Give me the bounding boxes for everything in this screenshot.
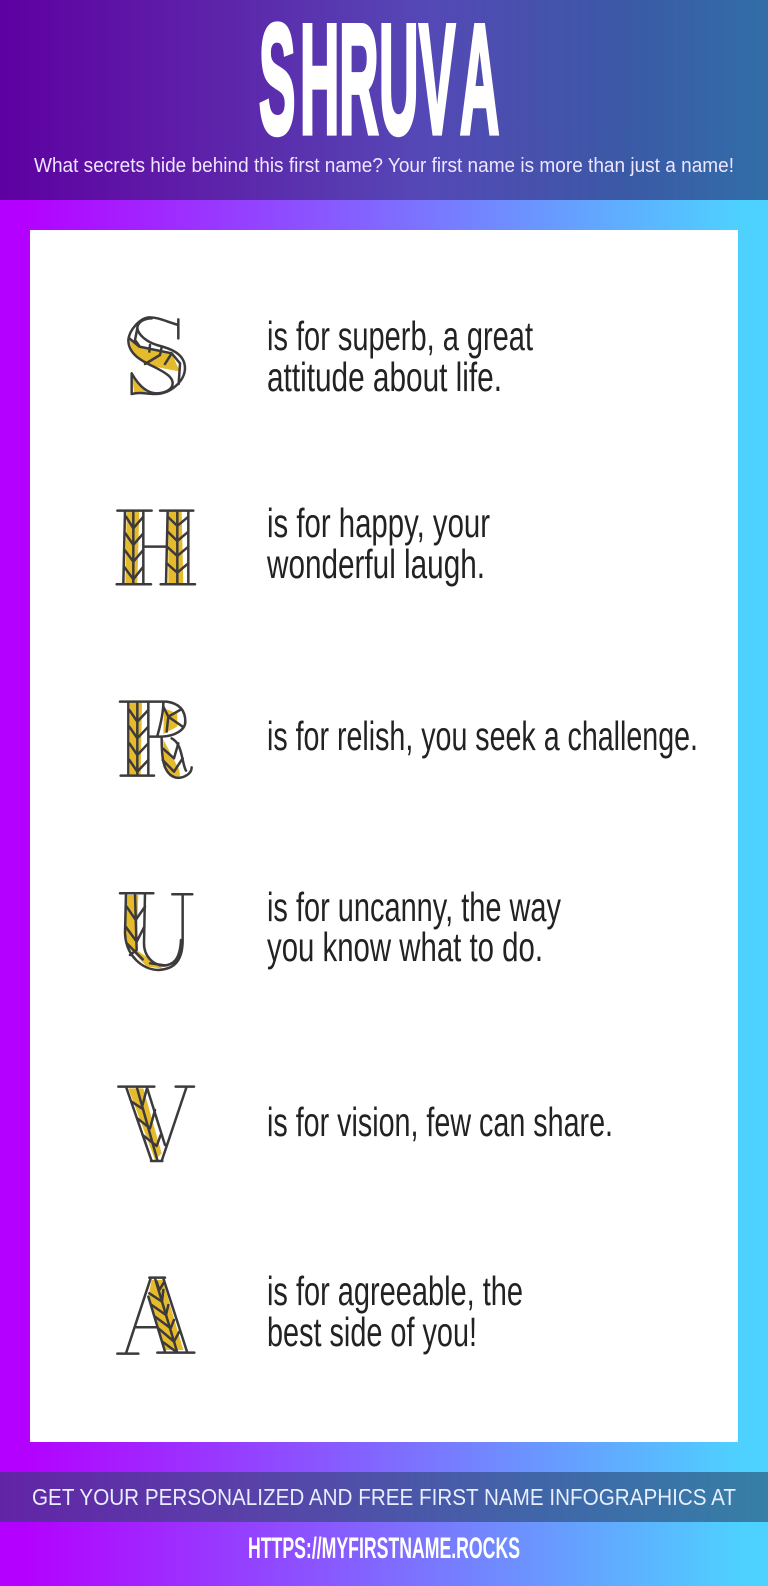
icon: letter V <box>118 1087 194 1161</box>
text: S: is for superb, a great <box>267 313 533 359</box>
text: H: wonderful laugh. <box>266 541 485 587</box>
row S <box>128 313 533 400</box>
icon: letter A <box>117 1278 194 1354</box>
text: H: is for happy, your <box>267 500 490 546</box>
text: A: is for agreeable, the <box>267 1268 523 1314</box>
icon: letter R <box>120 702 192 778</box>
text: U: you know what to do. <box>267 924 543 970</box>
header band <box>0 0 768 200</box>
icon: letter S <box>128 317 185 394</box>
icon: letter U <box>120 893 192 970</box>
text: S <box>267 313 533 400</box>
row V <box>118 1087 613 1161</box>
text: S: attitude about life. <box>267 354 502 400</box>
text: A: best side of you! <box>267 1309 477 1355</box>
icon: letter H <box>117 511 195 584</box>
text: A <box>267 1268 523 1355</box>
footer band <box>0 1472 768 1522</box>
row H <box>117 500 490 587</box>
text: U <box>267 884 561 970</box>
row A <box>117 1268 523 1355</box>
text: H <box>266 500 490 587</box>
subtitle: What secrets hide behind this first name? Your first name is more than just a name! <box>34 155 734 177</box>
footer url: HTTPS://MYFIRSTNAME.ROCKS <box>248 1532 520 1565</box>
text: V: is for vision, few can share. <box>267 1099 613 1145</box>
text: U: is for uncanny, the way <box>267 884 561 930</box>
row R <box>120 702 698 778</box>
panel: letters <box>30 230 738 1442</box>
row U <box>120 884 561 970</box>
